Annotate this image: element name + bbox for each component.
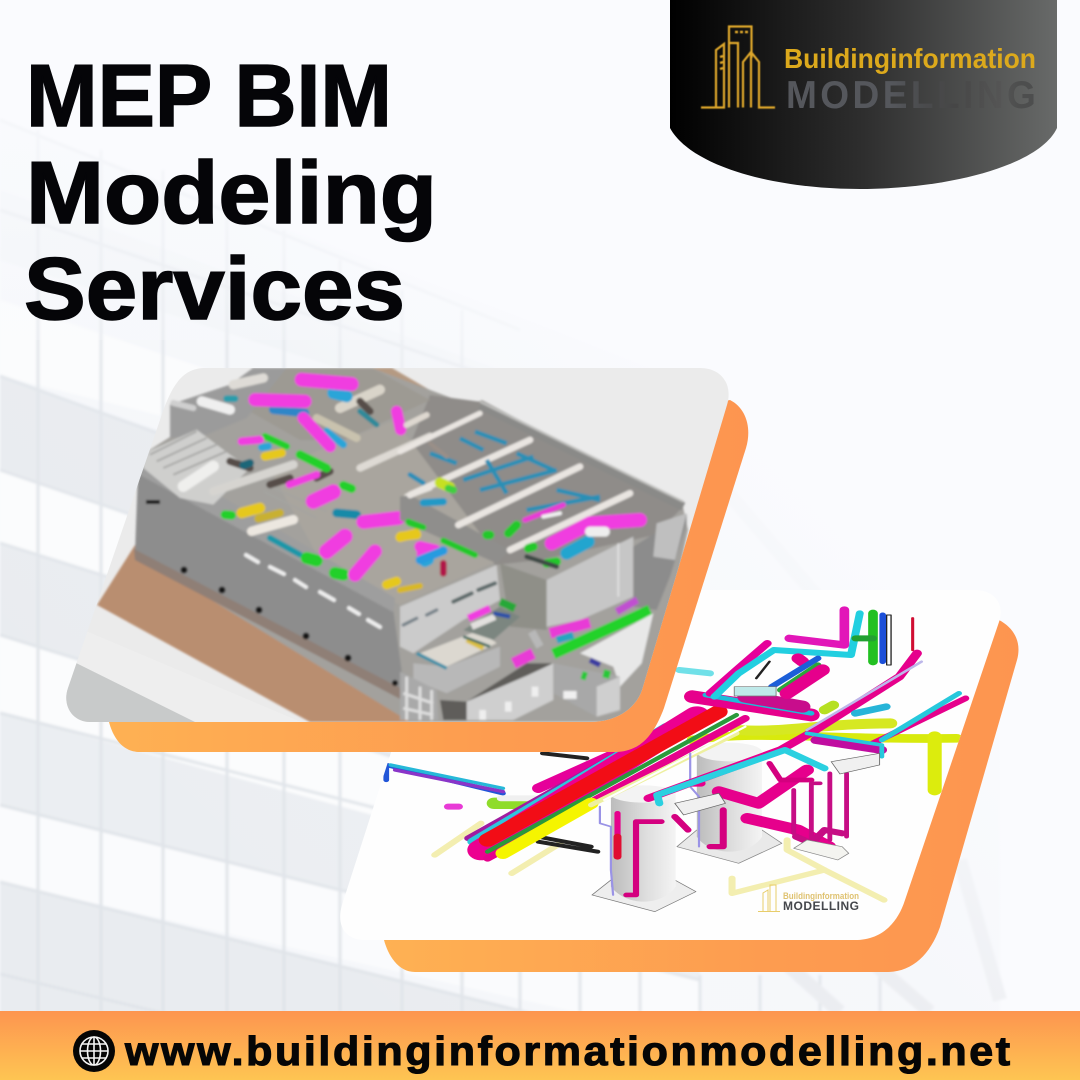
watermark logo: Buildinginformation [783,891,859,902]
orange backing shape: upper image [109,400,748,752]
green ducts [225,436,420,575]
building mass [135,368,688,722]
lower walls [440,663,552,720]
logo badge [670,0,1057,189]
cyan duct grid [430,432,600,510]
footer bar [0,1011,1080,1080]
icon: gold building outline [701,26,775,108]
mid roof equipment block [463,607,520,640]
blue and cyan ducts [227,393,428,561]
right rooftop and walls [400,402,687,720]
white parapet dashes [246,555,380,627]
cylinder tanks [592,743,782,912]
panel: building MEP model image [60,360,740,730]
black conduit [538,837,598,852]
wall openings [146,500,398,686]
green duct strip [532,632,540,647]
pipe hangers [675,793,725,815]
right roof ducts [552,520,640,543]
upper cross pipes [692,697,811,715]
magenta ducts [242,380,423,575]
roof cell shading [400,395,683,565]
tank pipes [614,811,621,835]
south wall [135,470,405,695]
left branch pipe [386,765,503,793]
website url: www.buildinginformationmodelling.net [124,1028,1010,1074]
logo wordmark: Buildinginformation [784,43,1036,74]
white side block [580,613,653,687]
upper-left rooftop equipment [143,368,430,585]
icon: globe [73,1030,115,1072]
title: Modeling [26,143,437,242]
title: Services [24,239,405,338]
white roof units [183,466,213,486]
yellow-green crossing [692,735,957,740]
watermark logo [758,885,859,913]
outer parapet [568,447,686,509]
separating roof band [400,495,510,563]
orange backing shape: lower image [384,620,1018,972]
rooftop beams [400,413,630,550]
logo badge: MODELLING [786,74,1036,117]
watermark logo: MODELLING [783,899,859,913]
main trunk [532,752,615,793]
pale yellow drains [435,823,884,900]
ladder structure [400,672,438,720]
panel: MEP pipe model image [340,606,1000,940]
dark gaps [230,401,370,485]
ground [97,545,420,722]
yellow ducts [242,453,417,585]
pipe network [386,610,966,912]
long diagonal to upper right [648,653,917,798]
title [24,46,437,338]
signage marks on wall [453,583,495,602]
title: MEP BIM [26,46,392,145]
building model [97,368,688,722]
light front walls [400,565,500,653]
left roof ducts [420,547,435,550]
lower rooftop block [413,647,500,693]
